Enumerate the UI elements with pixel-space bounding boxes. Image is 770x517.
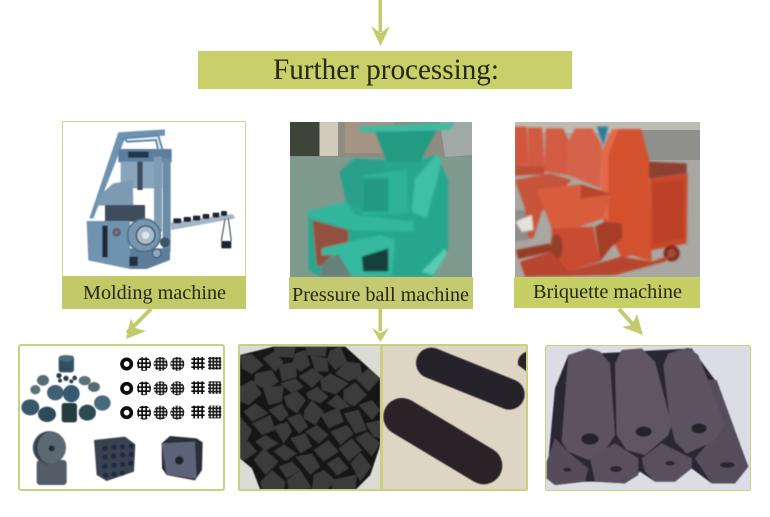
heading: Further processing: Further processing: (273, 53, 499, 86)
panel: pressed balls and oval briquettes (238, 344, 528, 491)
image: stacked charcoal briquettes (546, 346, 750, 490)
label: Briquette machine (514, 277, 700, 308)
arrow: pressure ball to products (372, 309, 389, 342)
label: Pressure ball machine (289, 277, 473, 309)
heading: Further processing (198, 51, 572, 89)
image: pile of black coal balls (240, 346, 380, 490)
arrow: molding to products (126, 309, 151, 339)
label: Molding machine (62, 276, 246, 309)
panel: hexagonal hollow briquettes (545, 345, 751, 491)
panel: briquette machine (514, 121, 700, 308)
arrow: briquette to products (619, 309, 643, 335)
image: oval black briquettes (383, 346, 527, 489)
image: coal pieces cluster (21, 355, 203, 485)
panel: molding machine (62, 122, 246, 309)
label: Briquette machine: Briquette machine (533, 281, 682, 303)
label: Pressure ball machine: Pressure ball machine (292, 284, 469, 306)
image: green pressure ball machine (289, 121, 473, 278)
arrow: into heading (371, 0, 390, 46)
panel: pressure ball machine (289, 121, 473, 309)
image: red briquette machine (514, 121, 700, 278)
label: Molding machine: Molding machine (83, 282, 226, 304)
panel: molded coal products (19, 345, 224, 490)
image: cross-section patterns (122, 357, 221, 420)
image: blue molding machine (87, 129, 235, 269)
